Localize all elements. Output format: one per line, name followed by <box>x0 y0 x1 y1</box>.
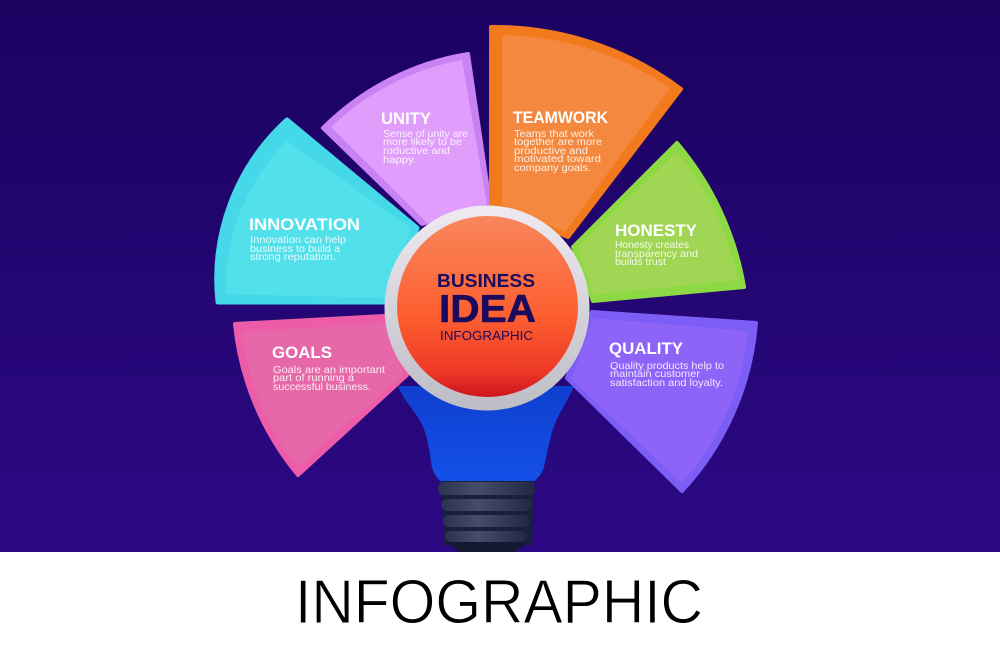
text: honesty: Honesty creates <box>615 239 689 251</box>
heading: innovation: INNOVATION <box>249 215 360 234</box>
text: teamwork: together are more <box>514 136 602 148</box>
center title: BUSINESS <box>437 271 535 291</box>
text: teamwork <box>514 128 602 174</box>
bulb screw <box>438 481 535 552</box>
heading: honesty: HONESTY <box>615 221 698 240</box>
text: honesty <box>615 239 698 268</box>
center title: INFOGRAPHIC <box>440 328 533 343</box>
panel: teamwork <box>491 27 681 237</box>
text: honesty: builds trust <box>615 256 666 268</box>
text: goals: Goals are an important <box>273 364 385 376</box>
heading: teamwork: TEAMWORK <box>513 108 609 127</box>
text: quality: Quality products help to <box>610 360 724 372</box>
panel: goals <box>235 316 407 475</box>
footer title: INFOGRAPHIC <box>295 568 703 637</box>
text: quality: maintain customer <box>610 368 701 380</box>
text: goals: part of running a <box>273 372 354 384</box>
heading: goals: GOALS <box>272 343 332 362</box>
center title <box>437 271 536 343</box>
bulb glass <box>398 386 574 482</box>
text: goals: successful business. <box>273 381 371 393</box>
text: innovation <box>250 234 346 263</box>
heading: unity: UNITY <box>381 109 432 128</box>
text: teamwork: motivated toward <box>514 153 601 165</box>
panel: honesty <box>573 143 744 301</box>
text: innovation: strong reputation. <box>250 251 336 263</box>
text: unity: Sense of unity are <box>383 128 468 140</box>
panel: unity <box>323 54 490 224</box>
text: quality: satisfaction and loyalty. <box>610 377 723 389</box>
footer band <box>0 552 1000 650</box>
text: teamwork: productive and <box>514 145 588 157</box>
panel: innovation <box>217 120 417 302</box>
heading: quality: QUALITY <box>609 339 684 358</box>
text: unity <box>383 128 468 166</box>
panel: quality <box>567 312 756 491</box>
text: honesty: transparency and <box>615 248 698 260</box>
text: innovation: business to build a <box>250 243 340 255</box>
text: goals <box>273 364 385 393</box>
center title: IDEA <box>439 288 536 331</box>
text: unity: more likely to be <box>383 136 462 148</box>
text: unity: happy. <box>383 154 416 166</box>
light bulb base <box>398 386 574 552</box>
text: teamwork: company goals. <box>514 162 591 174</box>
center button <box>384 206 590 410</box>
text: teamwork: Teams that work <box>514 128 595 140</box>
text: unity: roductive and <box>383 145 450 157</box>
text: quality <box>610 360 724 389</box>
text: innovation: Innovation can help <box>250 234 346 246</box>
